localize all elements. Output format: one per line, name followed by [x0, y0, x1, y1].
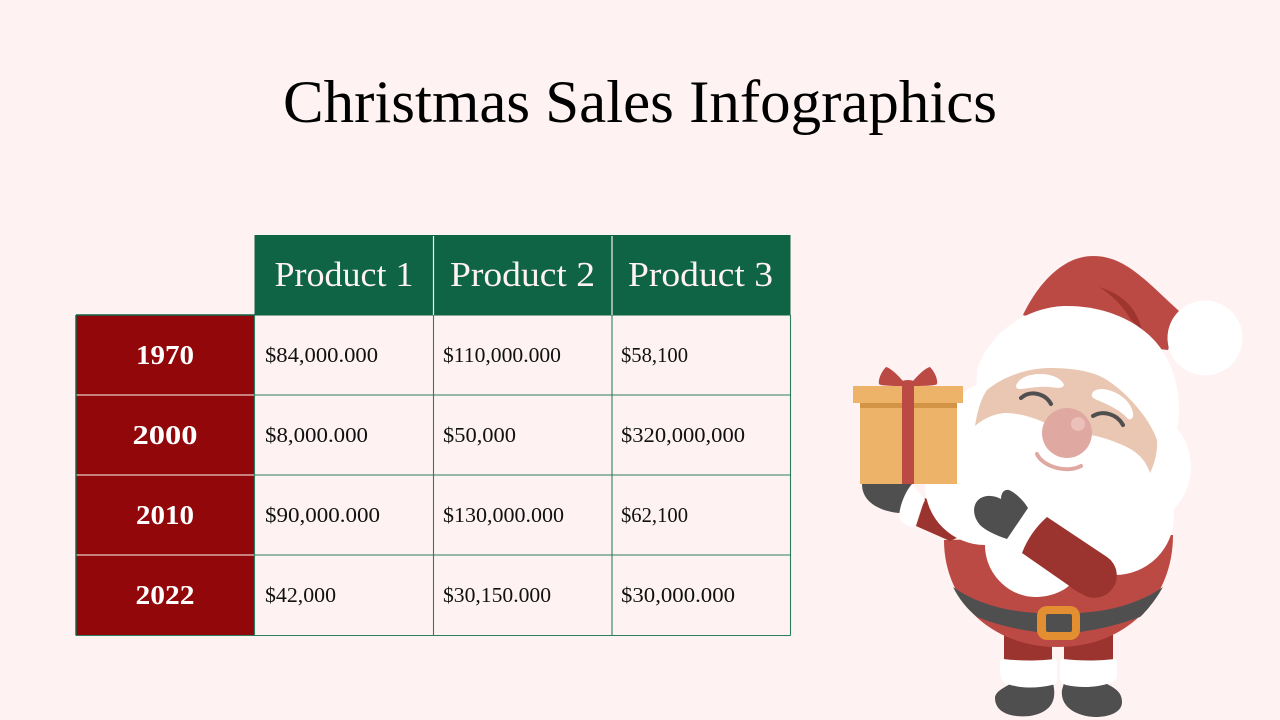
data values: $8,000.000 — [265, 423, 368, 447]
boot cuffs — [1000, 659, 1117, 688]
year column — [76, 315, 254, 636]
legs — [1004, 630, 1113, 664]
left glove — [862, 484, 912, 513]
illustration: Santa holding a gift — [853, 256, 1242, 717]
left cuff — [899, 484, 925, 527]
beard and hair — [925, 306, 1191, 597]
body — [944, 535, 1173, 647]
face — [975, 368, 1157, 473]
eyes — [1021, 393, 1123, 425]
lid — [853, 386, 963, 403]
data values: $42,000 — [265, 583, 336, 607]
header: Product 2: Product 2 — [450, 255, 595, 294]
sales table — [76, 235, 790, 636]
header: Product 1: Product 1 — [274, 255, 414, 294]
right arm sleeve — [1022, 517, 1117, 598]
data values: $62,100 — [621, 503, 688, 527]
data values — [265, 343, 745, 607]
mouth — [1037, 454, 1081, 469]
box — [860, 400, 957, 484]
data values: $84,000.000 — [265, 343, 378, 367]
left arm sleeve — [916, 498, 975, 541]
data values: $58,100 — [621, 343, 688, 367]
nose — [1042, 408, 1092, 458]
boots — [995, 683, 1122, 717]
pompom — [1168, 300, 1242, 376]
mitten — [974, 490, 1028, 539]
data values: $30,000.000 — [621, 583, 735, 607]
header: Product 3: Product 3 — [628, 255, 773, 294]
hat — [1023, 256, 1179, 350]
hat crease — [1099, 287, 1142, 330]
year 1970: 1970 — [136, 340, 194, 370]
year 2010: 2010 — [136, 500, 194, 530]
data values: $130,000.000 — [443, 503, 564, 527]
gift box — [853, 367, 963, 484]
title: Christmas Sales Infographics — [283, 69, 997, 135]
year 2000: 2000 — [132, 420, 198, 450]
year 2022: 2022 — [136, 580, 194, 610]
data values: $320,000,000 — [621, 423, 745, 447]
bow — [879, 367, 937, 386]
eyebrows — [1016, 374, 1133, 419]
data values: $30,150.000 — [443, 583, 551, 607]
belt buckle — [1037, 606, 1080, 640]
data values: $50,000 — [443, 423, 516, 447]
ribbon — [902, 380, 914, 484]
data values: $110,000.000 — [443, 343, 561, 367]
header row: products — [254, 235, 790, 316]
belt — [953, 587, 1163, 632]
data values: $90,000.000 — [265, 503, 380, 527]
